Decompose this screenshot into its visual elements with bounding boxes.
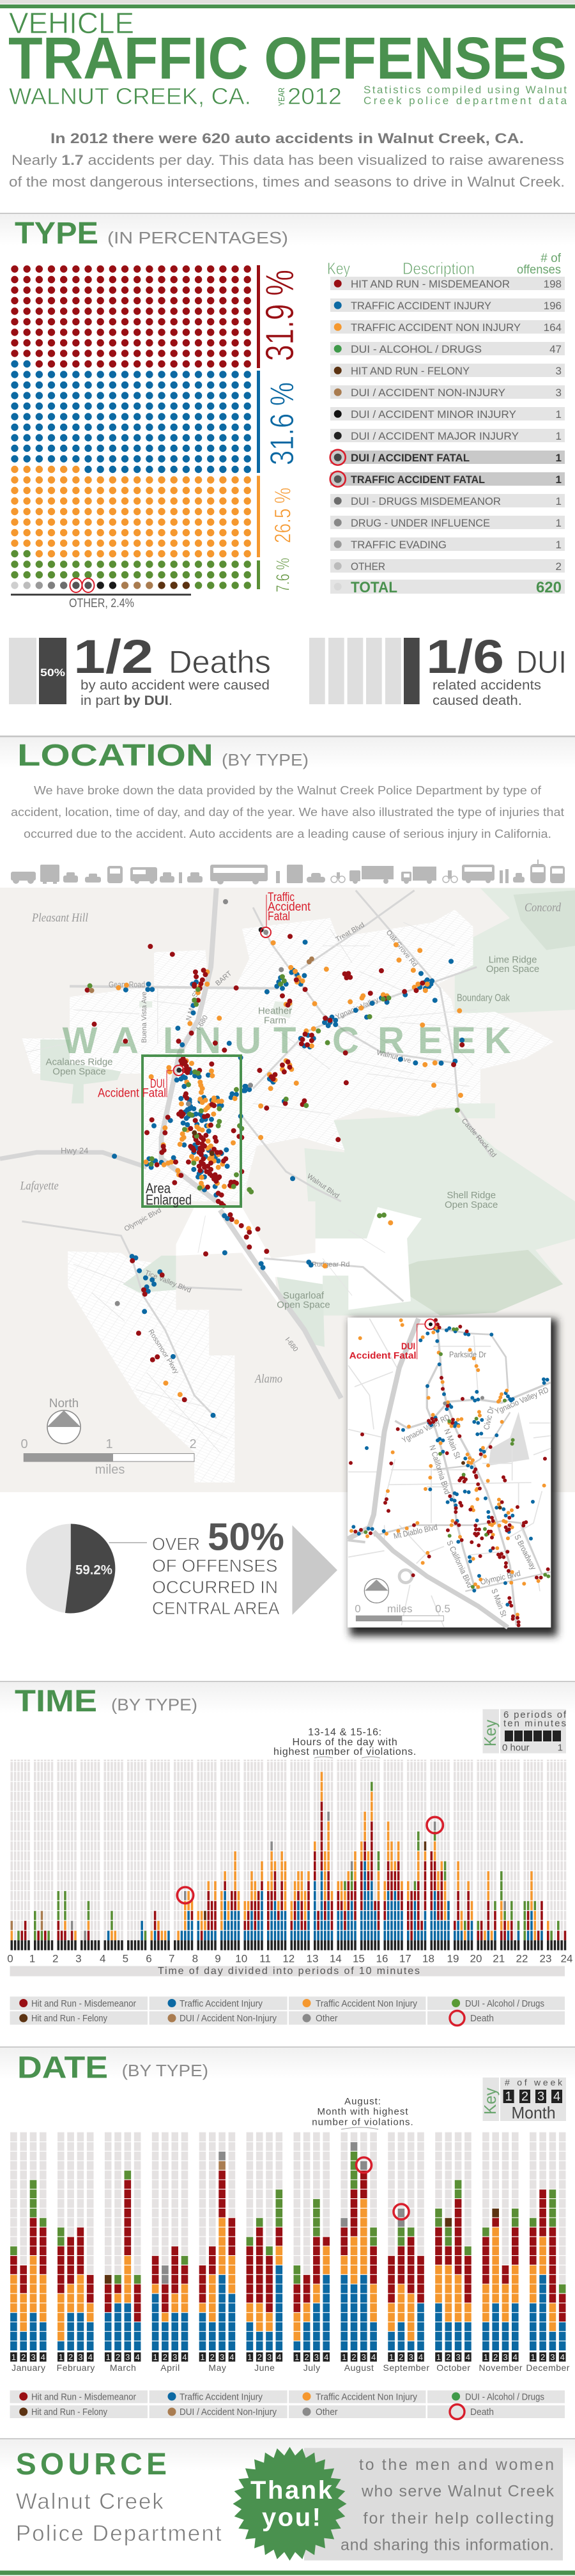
map: road labels: Oak Grove Rd [385, 929, 418, 969]
inset: accident dots [351, 1320, 548, 1625]
label: 31.9%: 31.9 % [258, 270, 302, 361]
section header: type: TYPE [15, 217, 98, 251]
map: place names: Alamo [254, 1373, 282, 1385]
date annotation: number of violations. [312, 2117, 414, 2128]
week number boxes: 1234 [389, 2352, 423, 2362]
month labels [12, 2363, 570, 2373]
legend: time chart: Traffic Accident Non Injury [316, 1998, 417, 2009]
time axis labels: 21 [493, 1953, 505, 1965]
key table: Key [327, 259, 350, 278]
map: area enlarged label: Area [146, 1180, 171, 1196]
key table: TRAFFIC ACCIDENT FATAL [351, 474, 485, 486]
july [297, 2199, 326, 2350]
map: place names: Open Space [52, 1067, 106, 1077]
legend: date chart: Traffic Accident Injury [180, 2391, 263, 2403]
header: title block [0, 0, 575, 109]
stat: 1/2 deaths: in part by DUI. [80, 693, 172, 708]
time axis labels: 20 [470, 1953, 482, 1965]
location description text [11, 784, 564, 840]
key table: TRAFFIC ACCIDENT INJURY [351, 300, 491, 312]
month labels: September [383, 2363, 429, 2373]
time axis labels: 16 [376, 1953, 388, 1965]
week number boxes: 1234 [484, 2352, 518, 2362]
label: 7.6%: 7.6 % [273, 558, 293, 592]
map: south parks and urban area [68, 1201, 575, 1483]
key table: 2 [556, 560, 562, 573]
time axis labels: 9 [215, 1953, 221, 1965]
key table: DUI / ACCIDENT MINOR INJURY [351, 408, 516, 420]
month labels: March [110, 2363, 136, 2373]
section header: date [0, 2046, 575, 2085]
month labels: January [12, 2363, 45, 2373]
week number boxes: 1234 [200, 2352, 234, 2362]
week number boxes: 1234 [12, 2352, 45, 2362]
january [13, 2180, 43, 2350]
map: place names: Open Space [445, 1199, 498, 1210]
time axis labels: 18 [422, 1953, 434, 1965]
time axis labels: 5 [123, 1953, 128, 1965]
key table: # of [540, 252, 562, 265]
time axis labels: 11 [259, 1953, 271, 1965]
key table: OTHER [351, 560, 385, 573]
section header: location [0, 736, 575, 773]
time axis labels: 6 [146, 1953, 152, 1965]
legend: time chart [10, 1996, 565, 2026]
stat: 1/6 DUI: related accidents [433, 678, 541, 693]
section header: type: (IN PERCENTAGES) [107, 228, 288, 247]
footer band [0, 2570, 575, 2575]
enlarged map inset [348, 1318, 557, 1636]
key table: 47 [549, 343, 562, 355]
time axis labels: 8 [192, 1953, 198, 1965]
inset: DUI accident fatal annotation: Accident Fatal [349, 1350, 417, 1361]
thank-you text [341, 2456, 555, 2554]
section header: type [0, 213, 575, 251]
death rings in waffle [70, 578, 95, 592]
inset: road labels: Parkside Dr [449, 1350, 486, 1359]
stat: 1/2 deaths: 50% [40, 667, 65, 679]
map: road labels: Treat Blvd [335, 921, 366, 944]
callout: over 50%: 50% [208, 1516, 284, 1558]
other bracket [11, 594, 191, 596]
october [438, 2180, 468, 2350]
inset: DUI accident fatal annotation: DUI [401, 1341, 415, 1352]
march [108, 2170, 137, 2350]
key table: TRAFFIC ACCIDENT NON INJURY [351, 321, 521, 334]
subtitle: statistics note: Statistics compiled using Walnut [364, 84, 567, 96]
date key: Key [480, 2088, 500, 2115]
map: scale bar: 1 [105, 1437, 113, 1451]
key table: 196 [544, 300, 562, 312]
map: road labels: N Main St [185, 990, 200, 1022]
key table: 620 [536, 579, 562, 596]
map: road labels: Rudgear Rd [312, 1261, 349, 1269]
map: traffic accident fatal annotation: Accident [268, 900, 311, 914]
stat: 1/6 DUI [309, 630, 567, 708]
section: source [0, 2439, 575, 2546]
time axis caption [10, 1966, 565, 1977]
key table: TOTAL [351, 579, 397, 596]
week number boxes: 1234 [106, 2352, 140, 2362]
legend: date chart: Death [470, 2407, 494, 2418]
map: road labels: Ygnacio Valley [334, 996, 380, 1021]
week number boxes: 1234 [295, 2352, 328, 2362]
key table: HIT AND RUN - MISDEMEANOR [351, 278, 510, 290]
legend: time chart: Hit and Run - Misdemeanor [31, 1998, 136, 2009]
map: road labels: Castle Rock Rd [460, 1117, 498, 1159]
key table: DUI / ACCIDENT FATAL [351, 452, 470, 464]
time key: 1 [558, 1743, 563, 1754]
map: road labels: BART [214, 969, 233, 987]
intro text: Nearly 1.7 accidents per day. This data has been visualized to raise awareness [12, 152, 564, 168]
inset: road labels: N Main St [442, 1428, 463, 1460]
subtitle: statistics note line 2: Creek police department data [364, 95, 567, 107]
stat: 1/6 DUI: 1/6 [426, 630, 504, 683]
legend: date chart: Traffic Accident Non Injury [316, 2391, 417, 2403]
key table: 198 [544, 278, 562, 290]
key table [327, 252, 565, 596]
month labels: October [436, 2363, 471, 2373]
map: parks and open spaces north [304, 888, 575, 1201]
map: scale bar: miles [95, 1463, 125, 1477]
time axis labels: 3 [75, 1953, 82, 1965]
starburst badge: thank you: you! [262, 2504, 321, 2532]
key table: 1 [556, 430, 562, 442]
inset: road labels: S California Blvd [445, 1539, 475, 1589]
week number boxes: 1234 [153, 2352, 187, 2362]
time annotation: 13-14 & 15-16: [308, 1727, 382, 1738]
map watermark: walnut creek: WALNUTCREEK [63, 1020, 511, 1061]
time key: 6 periods of [503, 1709, 567, 1720]
map: road labels [123, 921, 498, 1375]
map: place names: Sugarloaf [283, 1290, 325, 1301]
icon row: vehicles [11, 860, 565, 884]
subtitle: year label: YEAR [277, 88, 286, 106]
time annotation [273, 1727, 417, 1758]
date annotation [312, 2096, 414, 2129]
date key: # of week [505, 2078, 563, 2088]
time key: 0 hour [502, 1743, 530, 1754]
map: place names [20, 901, 561, 1385]
time axis labels: 0 [7, 1953, 13, 1965]
map: traffic accident fatal annotation: Fatal [268, 910, 290, 923]
key table: 3 [556, 387, 562, 399]
date key: Month [511, 2103, 556, 2122]
month labels: April [160, 2363, 180, 2373]
map: place names: Boundary Oak [457, 993, 510, 1004]
pie chart: central area share: 59.2% [75, 1563, 112, 1577]
map: accident dots south [118, 1215, 390, 1415]
date annotation: August: [344, 2096, 381, 2107]
callout: over 50%: OCCURRED IN [152, 1577, 278, 1597]
legend: time chart: DUI / Accident Non-Injury [180, 2013, 277, 2024]
map: road labels: Walnut Blvd [305, 1173, 341, 1200]
callout: over 50% [152, 1516, 284, 1618]
legend: date chart: Other [316, 2407, 338, 2418]
section header: time: TIME [15, 1685, 97, 1718]
inset: road labels: Mt Diablo Blvd [393, 1523, 438, 1541]
inset: roads [348, 1318, 551, 1628]
intro text [9, 130, 565, 190]
legend: date chart [10, 2390, 565, 2419]
thank-you text: for their help collecting [363, 2510, 554, 2527]
inset: DUI accident fatal annotation [349, 1319, 435, 1361]
week number boxes: 1234 [436, 2352, 470, 2362]
map: highways and roads north [0, 888, 514, 1201]
section header: time: (BY TYPE) [111, 1695, 197, 1714]
bar chart: offenses by week and month [0, 2142, 575, 2350]
week number boxes: 1234 [531, 2352, 565, 2362]
time axis labels: 10 [235, 1953, 247, 1965]
inset: road labels [393, 1350, 550, 1618]
key table: 164 [544, 321, 562, 334]
key table: DUI - DRUGS MISDEMEANOR [351, 495, 501, 507]
map: traffic accident fatal annotation [261, 891, 311, 937]
map: road labels: I-680 [195, 1014, 210, 1031]
time axis labels: 7 [169, 1953, 174, 1965]
september [392, 2208, 420, 2350]
map: place names: Geary Road [109, 980, 145, 989]
date annotation: Month with highest [317, 2106, 409, 2117]
legend: date chart: DUI / Accident Non-Injury [180, 2407, 277, 2418]
inset: scale bar: 0 [355, 1603, 361, 1615]
subtitle: city: WALNUT CREEK, CA. [9, 83, 251, 109]
key table: DUI - ALCOHOL / DRUGS [351, 343, 482, 355]
thank-you text: and sharing this information. [341, 2536, 554, 2554]
key table: DRUG - UNDER INFLUENCE [351, 517, 490, 529]
map: DUI accident fatal annotation: Accident Fatal [98, 1087, 166, 1100]
time annotation: highest number of violations. [273, 1747, 417, 1757]
inset: road labels: Ygnacio Valley RD [493, 1385, 550, 1416]
bar chart: offenses by time of day [0, 1762, 575, 1945]
week number boxes: 1234 [342, 2352, 376, 2362]
stat: 1/2 deaths: by auto accident were caused [80, 678, 270, 693]
section header: location: LOCATION [17, 739, 213, 773]
starburst badge: thank you: Thank [250, 2476, 333, 2504]
inset: road labels: S Broadway [512, 1533, 538, 1571]
week number boxes [10, 2352, 566, 2362]
section header: date: DATE [17, 2051, 108, 2085]
map: DUI accident fatal annotation: DUI [150, 1077, 165, 1091]
map: road labels: I-680 [284, 1336, 300, 1354]
label: 31.6%: 31.6 % [264, 382, 301, 465]
legend: time chart: Death [470, 2013, 494, 2024]
legend: date chart: Hit and Run - Felony [31, 2407, 107, 2418]
stat: 1/6 DUI: caused death. [433, 693, 522, 708]
pie chart: central area share [26, 1523, 147, 1613]
inset: scale bar [355, 1603, 450, 1621]
map: area enlarged label [146, 1180, 192, 1208]
time axis labels: 14 [330, 1953, 342, 1965]
percentage brackets and labels [11, 265, 302, 610]
map: traffic accident fatal annotation: Traffic [268, 891, 295, 904]
inset: scale bar: 0.5 [435, 1603, 450, 1615]
time annotation: Hours of the day with [293, 1737, 397, 1748]
legend: date chart: DUI - Alcohol / Drugs [465, 2391, 544, 2403]
time axis labels: 2 [52, 1953, 58, 1965]
map: accident dots outside enlarged area [88, 902, 462, 1192]
time key [480, 1709, 567, 1754]
time axis labels: 17 [399, 1953, 411, 1965]
stat: 1/2 deaths: Deaths [169, 644, 271, 680]
thank-you text: to the men and women [359, 2456, 554, 2474]
death rings [177, 1817, 443, 1903]
map: place names: Acalanes Ridge [45, 1057, 113, 1068]
inset: scale bar: miles [387, 1603, 413, 1615]
key table: HIT AND RUN - FELONY [351, 365, 470, 377]
map: place names: Shell Ridge [447, 1190, 496, 1201]
time axis labels: 23 [540, 1953, 551, 1965]
key table: 1 [556, 495, 562, 507]
time axis labels: 22 [516, 1953, 528, 1965]
section: source: SOURCE [16, 2448, 167, 2481]
key table: Description [402, 259, 475, 278]
month labels: December [526, 2363, 570, 2373]
location description text: We have broke down the data provided by the Walnut Creek Police Department by type of [34, 784, 542, 797]
june [250, 2189, 279, 2350]
key table: DUI / ACCIDENT MAJOR INJURY [351, 430, 519, 442]
location description text: occurred due to the accident. Auto accidents are a leading cause of serious injury in California. [24, 828, 551, 840]
time key: Key [480, 1720, 500, 1747]
time axis caption: Time of day divided into periods of 10 minutes [158, 1966, 420, 1977]
key table: 1 [556, 474, 562, 486]
key table: 3 [556, 365, 562, 377]
inset: north arrow [364, 1578, 388, 1603]
time axis labels: 12 [282, 1953, 295, 1965]
map: place names: Lafayette [20, 1180, 59, 1193]
intro text: of the most dangerous intersections, times and seasons to drive in Walnut Creek. [9, 174, 565, 190]
time axis labels: 13 [307, 1953, 318, 1965]
month labels: May [208, 2363, 226, 2373]
time axis labels: 19 [447, 1953, 459, 1965]
inset: road labels: Ygnacio Valley RD [401, 1412, 451, 1445]
key table: 1 [556, 408, 562, 420]
subtitle: year: 2012 [288, 83, 342, 109]
key table: TRAFFIC EVADING [351, 539, 447, 551]
section: source: Walnut Creek [16, 2489, 164, 2514]
arrow: to enlarged map [293, 1525, 337, 1615]
key table: 1 [556, 539, 562, 551]
legend: time chart: DUI - Alcohol / Drugs [465, 1998, 544, 2009]
month labels: February [57, 2363, 95, 2373]
month labels: November [479, 2363, 523, 2373]
thank-you panel [304, 2448, 563, 2561]
map: place names: Heather [258, 1006, 292, 1017]
december [533, 2189, 562, 2350]
inset: road labels: S Main St [489, 1587, 509, 1618]
map: north arrow: North [49, 1397, 79, 1410]
month labels: June [254, 2363, 275, 2373]
section: source: Police Department [16, 2521, 222, 2546]
map: accident dots central area [146, 1058, 245, 1206]
callout: over 50%: CENTRAL AREA [152, 1598, 280, 1618]
waffle chart: 620 offenses [15, 269, 248, 585]
map: place names: Lime Ridge [489, 955, 537, 966]
stat: 1/2 deaths [9, 630, 271, 708]
map: enlarged area frame [142, 1056, 241, 1207]
time axis labels: 24 [561, 1953, 572, 1965]
map: road labels: Buena Vista Ave [141, 992, 148, 1043]
inset: road labels: Olympic Blvd [480, 1569, 521, 1587]
map: road labels: Tice Valley Blvd [144, 1269, 192, 1295]
callout: over 50%: OF OFFENSES [152, 1555, 277, 1576]
title: vehicle: VEHICLE [9, 6, 134, 40]
map: scale bar [20, 1437, 197, 1477]
intro text: In 2012 there were 620 auto accidents in Walnut Creek, CA. [50, 130, 524, 146]
legend: date chart: Hit and Run - Misdemeanor [31, 2391, 136, 2403]
time key: ten minutes [503, 1718, 566, 1729]
time axis labels: 4 [100, 1953, 105, 1965]
map: white urban area north [22, 909, 554, 1201]
map: area enlarged label: Enlarged [146, 1192, 192, 1208]
november [486, 2208, 515, 2350]
key table: DUI / ACCIDENT NON-INJURY [351, 387, 505, 399]
week number boxes: 1234 [59, 2352, 93, 2362]
month labels: August [344, 2363, 374, 2373]
date key [480, 2078, 566, 2122]
stat: 1/2 deaths: 1/2 [73, 630, 153, 683]
key table: 1 [556, 452, 562, 464]
map: road labels: Olympic Blvd [123, 1207, 163, 1233]
map: place names: Open Space [486, 964, 539, 975]
location description text: accident, location, time of day, and day of the year. We have also illustrated the type of injuries that [11, 806, 564, 819]
map: north arrow [47, 1397, 80, 1444]
map: DUI accident fatal annotation [98, 1065, 184, 1100]
map: road labels: Rossmoor Pkwy [146, 1328, 180, 1375]
label: 26.5%: 26.5 % [271, 488, 296, 543]
section header: time [0, 1681, 575, 1718]
map: place names: Hwy 24 [61, 1146, 88, 1155]
may [203, 2151, 232, 2350]
section header: date: (BY TYPE) [122, 2061, 208, 2080]
starburst badge: thank you [233, 2447, 346, 2561]
map: walnut creek with accident locations [0, 888, 575, 1492]
legend: time chart: Hit and Run - Felony [31, 2013, 107, 2024]
august [344, 2142, 374, 2350]
thank-you text: who serve Walnut Creek [361, 2482, 555, 2500]
week number boxes: 1234 [247, 2352, 281, 2362]
date key: 1234 [505, 2090, 560, 2104]
time axis labels: 15 [353, 1953, 365, 1965]
map: place names: Open Space [277, 1300, 330, 1310]
map: place names: Concord [525, 901, 561, 914]
map: scale bar: 0 [20, 1437, 28, 1451]
callout: over 50%: OVER [152, 1534, 200, 1554]
legend: time chart: Other [316, 2013, 338, 2024]
february [61, 2227, 90, 2350]
time axis labels [7, 1953, 572, 1965]
percentage brackets and labels: OTHER, 2.4% [69, 597, 134, 610]
stat: 1/6 DUI: DUI [516, 644, 567, 680]
legend: time chart: Traffic Accident Injury [180, 1998, 263, 2009]
inset: road labels: Civic Dr [482, 1405, 496, 1431]
april [155, 2246, 185, 2350]
section header: location: (BY TYPE) [222, 750, 309, 769]
key table: offenses [517, 263, 561, 277]
inset: road labels: N California Blvd [427, 1444, 452, 1495]
time axis labels: 1 [29, 1953, 35, 1965]
map: place names: Farm [264, 1015, 286, 1026]
map: road labels: Walnut Ave [376, 1049, 412, 1065]
map: scale bar: 2 [189, 1437, 197, 1451]
month labels: July [303, 2363, 321, 2373]
map: place names: Pleasant Hill [31, 911, 88, 925]
key table: 1 [556, 517, 562, 529]
map: highways and roads south [22, 1210, 403, 1453]
death rings [356, 2157, 409, 2219]
